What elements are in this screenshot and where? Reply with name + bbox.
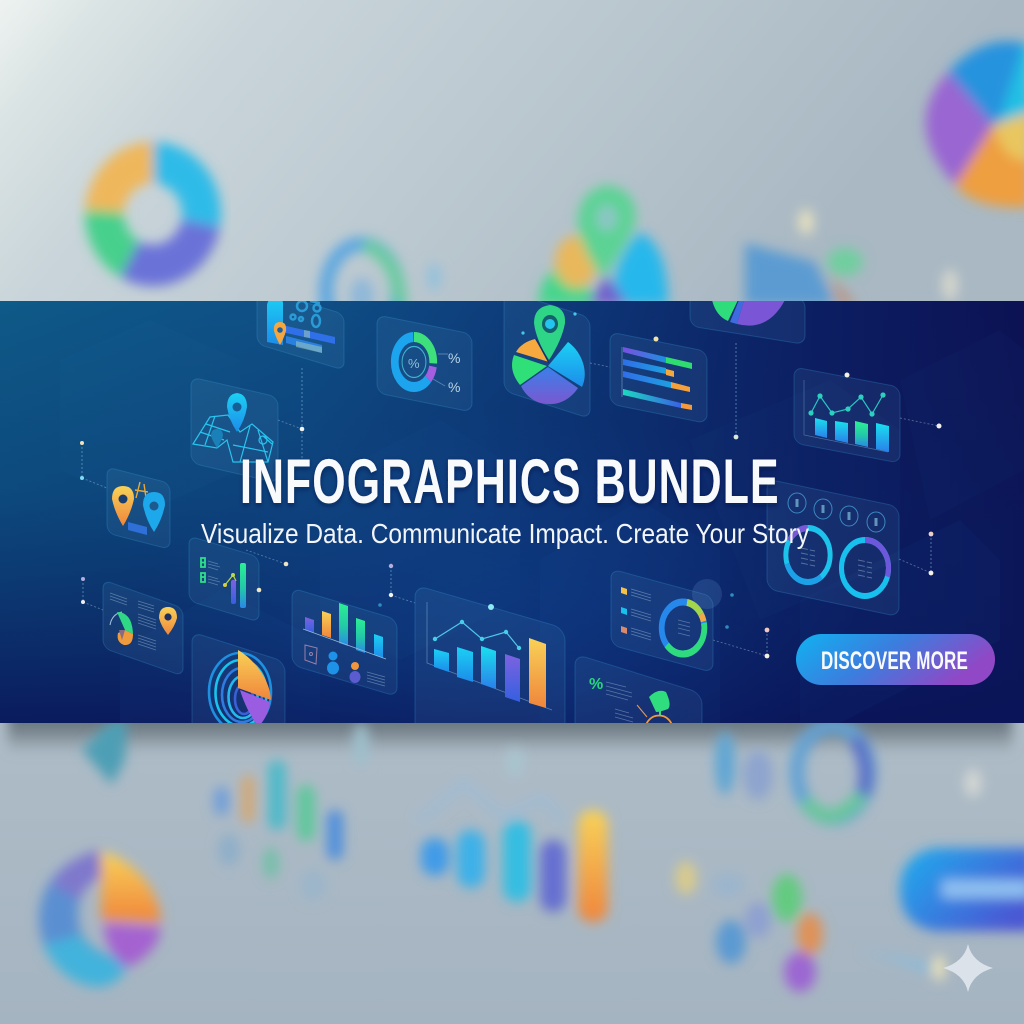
icon: square outline (305, 645, 317, 664)
band shadow (8, 712, 1012, 754)
ring two (841, 540, 889, 596)
panel: top pie (690, 280, 805, 344)
line (808, 392, 886, 417)
panel: twin rings (767, 479, 899, 617)
axes (427, 602, 552, 710)
blurred large chart (418, 783, 608, 922)
button: discover more: DISCOVER MORE (821, 647, 968, 675)
icon: small blue icons (290, 301, 320, 327)
text lines (801, 548, 872, 578)
icon: orange pin (159, 607, 177, 635)
text lines (110, 593, 156, 650)
icon: orange pin (274, 322, 286, 345)
blurred pins, bottom right (675, 861, 946, 992)
panel: concentric pie (192, 634, 286, 723)
blurred donut, bottom right (715, 726, 981, 818)
button: discover more (796, 634, 995, 685)
text lines (631, 589, 651, 640)
blurred wedge, bottom left (82, 720, 523, 785)
icon: orange pin (112, 486, 134, 526)
text lines (606, 682, 633, 722)
icon: cyan map shape (267, 296, 283, 345)
banner (0, 301, 1024, 723)
blurred background (0, 0, 1024, 302)
legend marks (201, 558, 205, 582)
icon: sparkle (943, 944, 993, 992)
donut chart (395, 337, 433, 387)
percent labels: % (408, 356, 420, 371)
percent sign: % (589, 676, 603, 693)
bars (282, 325, 335, 353)
panel: bars and people (292, 588, 397, 696)
blurred bars and highlights, top (745, 209, 958, 305)
text lines (367, 672, 385, 686)
blurred pie chart, bottom left (39, 850, 161, 987)
rings (209, 653, 271, 731)
connector dots (80, 336, 942, 658)
panel: map bars (256, 301, 344, 368)
blurred donut chart, top left (104, 162, 202, 266)
icon circles (788, 493, 885, 532)
pie (110, 612, 133, 645)
icon: small pin (211, 429, 223, 448)
bars (303, 603, 386, 659)
pie slices (238, 650, 271, 700)
panel: pie with green pin (504, 290, 590, 419)
icon: orange person (350, 662, 360, 683)
pie slices (712, 300, 785, 326)
icon: leaf and arc (637, 691, 672, 742)
bar rows (623, 347, 692, 410)
blurred background, lower (0, 722, 1024, 1024)
icon: blue person (327, 652, 339, 674)
line (433, 604, 521, 650)
percent labels: % (448, 350, 460, 366)
percent labels: % (448, 379, 460, 395)
panel: legend with donut (611, 569, 734, 673)
connector lines (82, 343, 939, 656)
legend squares (621, 587, 627, 634)
line (226, 576, 236, 584)
icon: line map (193, 415, 273, 462)
panel: horizontal bars (610, 332, 707, 423)
panel: two pins (107, 467, 170, 549)
blurred pie chart, top right (926, 41, 1024, 207)
small bars (128, 482, 148, 535)
panel: small bars with codes (189, 536, 259, 622)
ring one (786, 528, 830, 582)
icon glyphs (796, 499, 878, 526)
subtitle: Visualize Data. Communicate Impact. Create Your Story (201, 518, 809, 549)
panel: map with pin (191, 377, 278, 483)
panel: percent and leaf (575, 654, 702, 793)
title: INFOGRAPHICS BUNDLE (240, 447, 779, 517)
blurred donut, top centre (326, 244, 441, 340)
blurred map pin and pie (538, 185, 668, 305)
pie slices (512, 339, 585, 404)
panel: text with pie (103, 580, 183, 676)
bars (434, 638, 546, 708)
icon: blue pin (143, 492, 165, 532)
icon: green pin (534, 305, 565, 360)
percent labels (408, 354, 460, 392)
bars (231, 580, 236, 604)
panel: large line and bar chart (414, 588, 566, 723)
bars (815, 418, 889, 452)
blurred bar chart, bottom left (214, 760, 343, 901)
panel: line and bar chart, right (794, 367, 900, 463)
blurred button (900, 848, 1024, 931)
icon: cyan pin (227, 393, 247, 432)
text lines (208, 561, 220, 585)
donut (662, 602, 704, 654)
panel: percent donut (377, 315, 472, 412)
